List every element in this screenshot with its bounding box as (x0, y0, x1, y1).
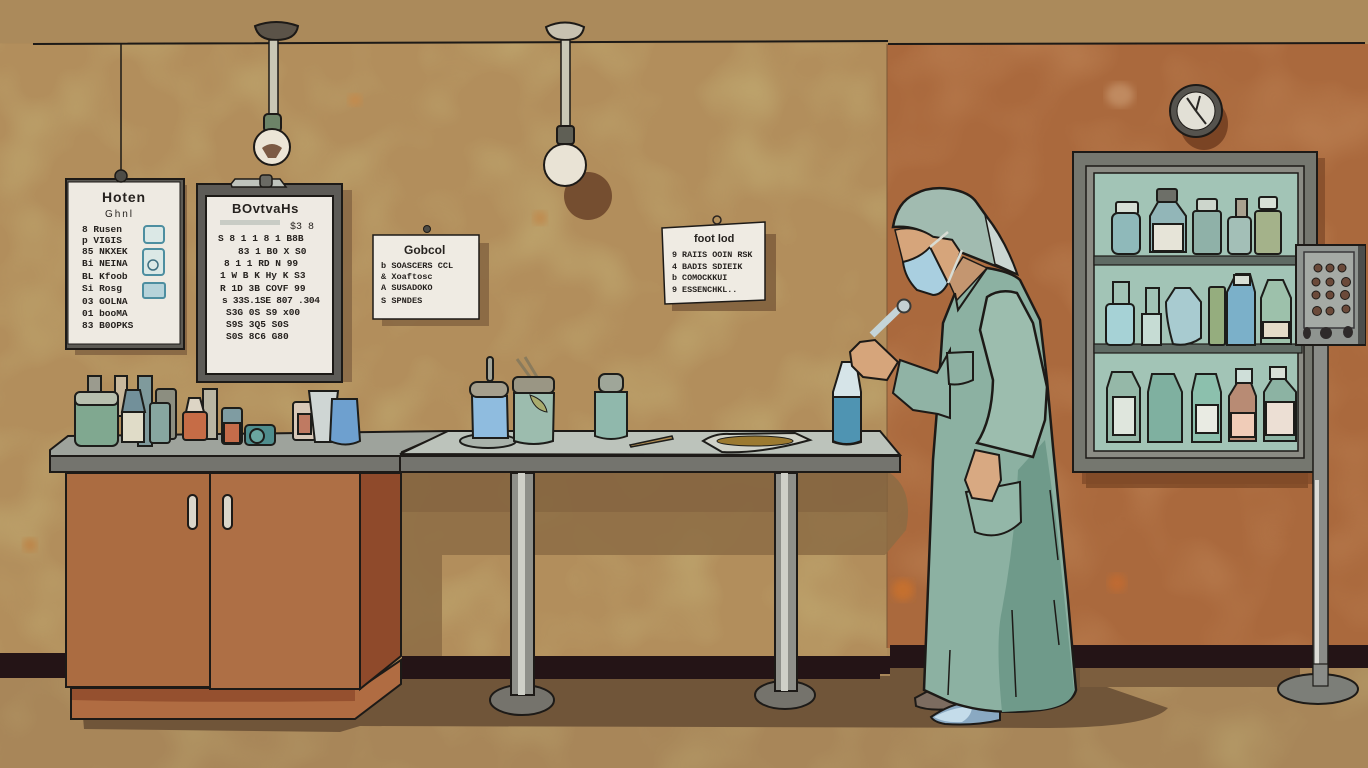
poster: centre clipboard: 8 1 1 RD N 99 (224, 258, 298, 269)
medicine cabinet (1073, 152, 1325, 484)
floor (0, 666, 1368, 768)
poster: small note right: 4 BADIS SDIEIK (672, 262, 743, 272)
poster: centre clipboard: R 1D 3B COVF 99 (220, 283, 306, 294)
table legs and feet (490, 473, 815, 715)
cap (893, 188, 1017, 274)
jars on table (460, 357, 810, 452)
poster: left chart: Hoten (102, 189, 145, 205)
poster: left chart: 01 booMA (82, 308, 128, 319)
bottles: bottom shelf (1107, 372, 1140, 442)
control panel (1296, 245, 1365, 345)
wall shadows under table (402, 472, 1308, 656)
poster: centre clipboard: s 33S.1SE 807 .304 (222, 295, 320, 306)
wall: right terracotta (887, 44, 1368, 648)
collar (955, 268, 987, 310)
poster: left chart: Ghnl (105, 209, 132, 220)
poster: centre clipboard: BOvtvaHs (232, 201, 299, 216)
floor stand pole (1278, 345, 1358, 704)
lamp left (121, 22, 298, 170)
poster: centre clipboard: $3 8 (290, 221, 314, 233)
poster: small note left: b SOASCERS CCL (381, 261, 453, 271)
wall rail line (33, 41, 1365, 44)
scientist (833, 188, 1076, 724)
chest pocket (947, 352, 973, 384)
lower pocket (966, 482, 1021, 535)
hand (850, 340, 898, 380)
poster: left chart: Si Rosg (82, 283, 122, 294)
poster: centre clipboard: S0S 8C6 G80 (226, 331, 289, 342)
poster: centre clipboard: 83 1 B0 X S0 (238, 246, 307, 257)
mask (903, 247, 948, 295)
poster: left chart: Bi NEINA (82, 258, 128, 269)
bottles: middle shelf (1113, 282, 1129, 304)
syringe (872, 308, 900, 335)
poster: small note left (373, 226, 489, 326)
lamp right (544, 22, 612, 220)
gown body (924, 268, 1076, 712)
bottles on counter (75, 376, 360, 446)
bottles: top shelf (1106, 189, 1296, 442)
poster: left chart: 03 GOLNA (82, 296, 128, 307)
baseboard (0, 645, 1368, 679)
poster: small note left: S SPNDES (381, 296, 422, 306)
poster: left chart: BL Kfoob (82, 271, 128, 282)
cabinet base and counter body (66, 473, 401, 719)
counter and table tops (50, 431, 900, 472)
poster: small note right: b COMOCKKUI (672, 273, 727, 283)
poster: small note right: 9 RAIIS OOIN RSK (672, 250, 753, 260)
poster: small note left: A SUSADOKO (381, 283, 433, 293)
forearm sleeve (893, 350, 950, 418)
poster: left chart: 83 B0OPKS (82, 320, 134, 331)
poster: small note left: & Xoaftosc (381, 272, 433, 282)
poster: small note right: 9 ESSENCHKL.. (672, 285, 737, 295)
poster: left chart: p VIGIS (82, 235, 122, 246)
poster: small note right (662, 216, 776, 311)
poster: centre clipboard: S 8 1 1 8 1 B8B (218, 233, 304, 244)
poster: centre clipboard: S9S 3Q5 S0S (226, 319, 289, 330)
poster: left chart (66, 170, 187, 355)
neck (948, 257, 987, 300)
blue bottle (833, 362, 861, 444)
clock (1170, 85, 1228, 150)
poster: small note right: foot lod (694, 233, 734, 245)
hanging hand (965, 450, 1001, 501)
poster: centre clipboard: 1 W B K Hy K S3 (220, 270, 306, 281)
poster: small note left: Gobcol (404, 243, 445, 257)
poster: left chart: 85 NKXEK (82, 246, 128, 257)
upper sleeve (977, 291, 1047, 457)
poster: centre clipboard (197, 175, 352, 382)
poster: left chart: 8 Rusen (82, 224, 122, 235)
face (895, 229, 960, 290)
shoes (915, 690, 1000, 724)
poster: centre clipboard: S3G 0S S9 x00 (226, 307, 300, 318)
